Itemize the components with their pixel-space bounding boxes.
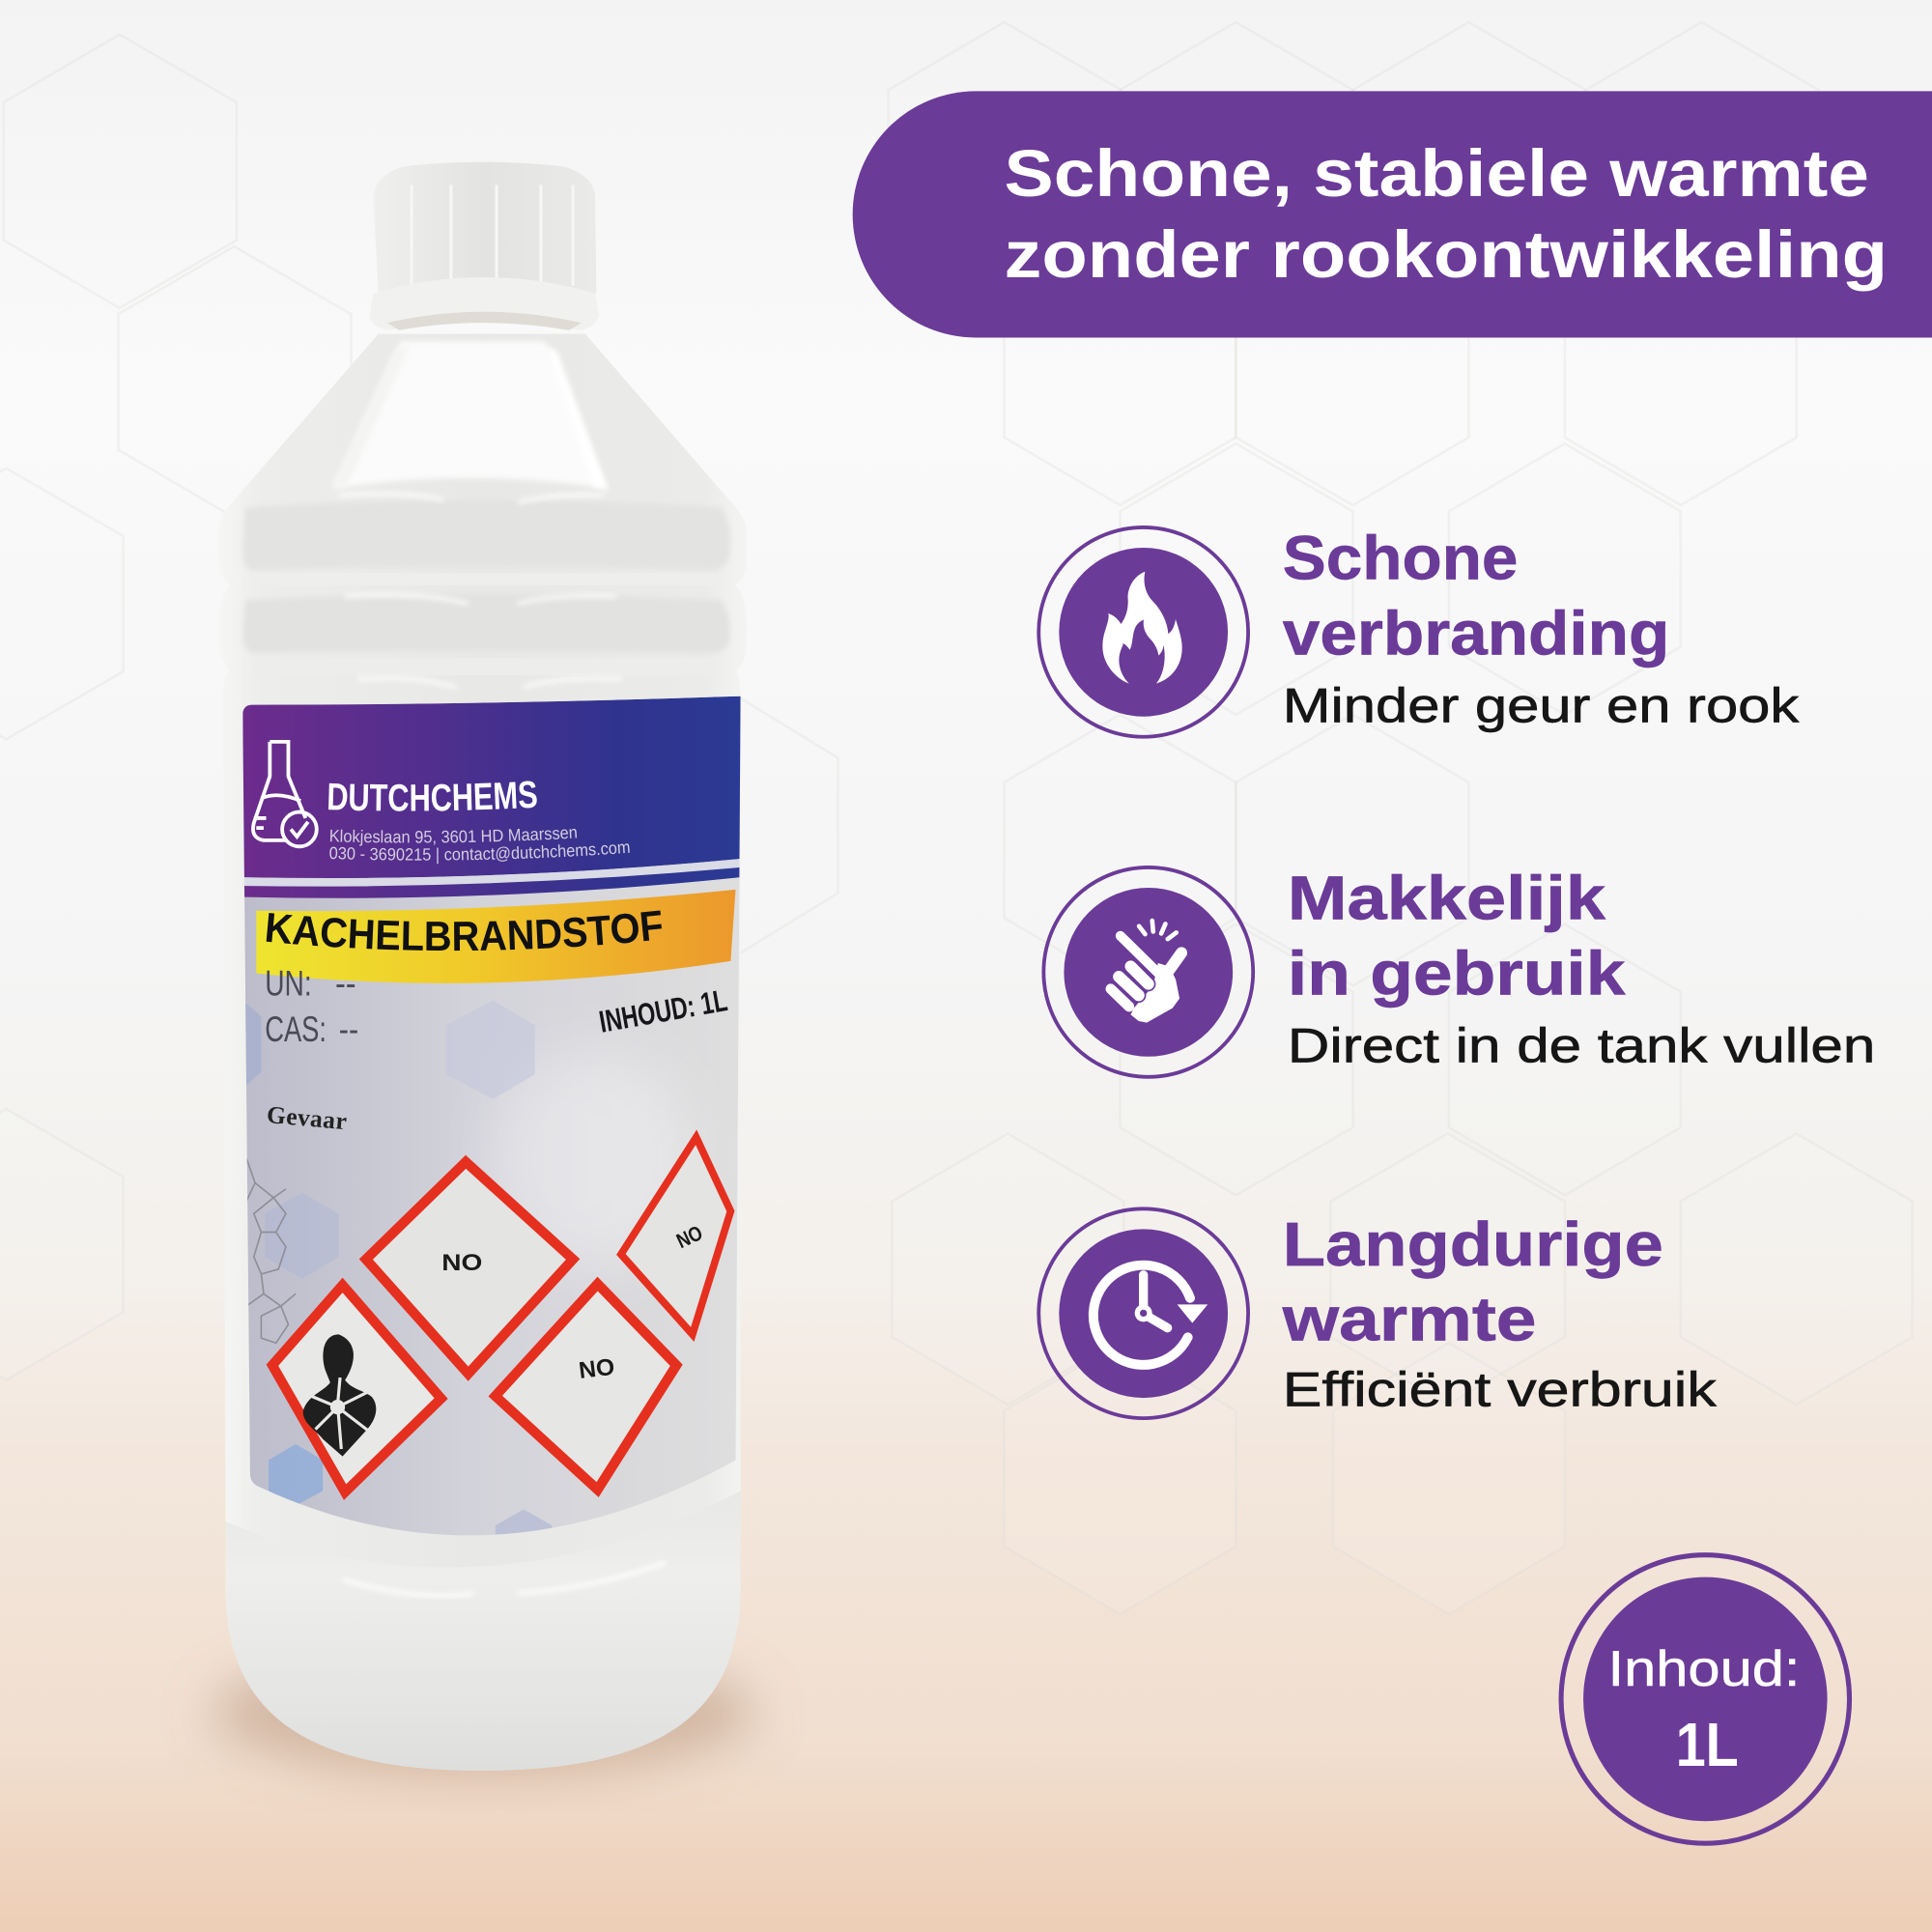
volume badge [1561,1555,1850,1843]
title line 1: Schone, stabiele warmte [1005,136,1869,211]
icon: flame [1038,527,1248,737]
feature: makkelijk in gebruik [1043,864,1875,1077]
feature heading: in gebruik [1288,938,1626,1008]
bottle shadow [210,1651,756,1775]
hazard diamond 3: NO [578,1354,616,1384]
feature heading: warmte [1282,1285,1537,1354]
feature description: Efficiënt verbruik [1283,1362,1717,1416]
product label [242,696,740,1536]
feature description: Direct in de tank vullen [1288,1018,1875,1072]
CAS field: -- [339,1009,358,1049]
hazard diamond 3 [496,1284,676,1490]
product bottle [225,162,740,1771]
label cloud decoration [499,1059,674,1258]
badge value: 1L [1676,1710,1739,1779]
label molecule lines [246,1158,296,1343]
title banner [853,91,1932,337]
hazard diamond 2: health hazard [272,1285,441,1492]
feature: langdurige warmte [1038,1208,1717,1418]
base section [225,1491,741,1771]
shoulder highlight [335,341,604,488]
bottle body [218,334,747,1771]
feature heading: Langdurige [1283,1209,1663,1279]
feature heading: Makkelijk [1288,864,1606,933]
feature heading: verbranding [1283,598,1669,668]
bottle cap [370,162,599,330]
UN field: -- [335,964,356,1004]
feature description: Minder geur en rook [1283,678,1799,732]
company contact: 030 - 3690215 | contact@dutchchems.com [329,843,630,864]
product name on label: KACHELBRANDSTOF [267,910,662,951]
logo flask icon [253,742,317,846]
shoulder ribs [242,494,730,688]
feature heading: Schone [1283,523,1518,592]
volume on label: INHOUD: 1L [596,982,730,1039]
hazard diamond 1 [366,1162,573,1374]
label hexagon decoration [241,998,552,1555]
feature: schone verbranding [1038,523,1799,737]
hazard diamond 4: NO [672,1220,706,1253]
yellow product band [256,890,735,983]
signal word: Gevaar [266,1100,348,1135]
brand name: DUTCHCHEMS [328,781,537,811]
hazard diamond 4 [621,1137,730,1334]
UN field: UN: [265,964,312,1004]
label header band [242,696,741,878]
UN field [265,964,356,1004]
company address: Klokjeslaan 95, 3601 HD Maarssen [330,829,578,846]
badge label: Inhoud: [1608,1641,1801,1697]
title line 2: zonder rookontwikkeling [1005,217,1888,292]
CAS field: CAS: [265,1009,327,1049]
icon: clock [1038,1208,1248,1418]
icon: finger snap [1043,867,1253,1077]
hazard diamond 1: NO [441,1250,482,1276]
